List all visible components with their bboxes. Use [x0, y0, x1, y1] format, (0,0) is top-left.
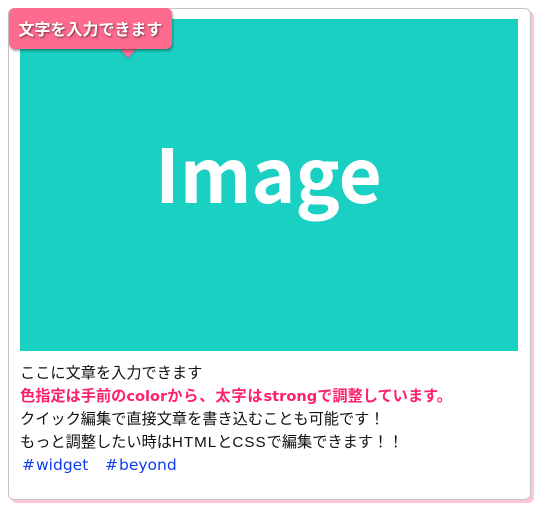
label pointer	[120, 49, 136, 58]
image placeholder: Image	[155, 118, 382, 225]
image placeholder	[20, 19, 518, 351]
text: #	[105, 456, 118, 474]
text block: クイック編集で直接文章を書き込むことも可能です！	[20, 411, 384, 428]
text block: 色指定は手前のcolorから、太字はstrongで調整しています。	[20, 388, 452, 405]
text: beyond	[119, 456, 177, 474]
text block: ここに文章を入力できます	[20, 365, 202, 382]
label badge	[9, 8, 172, 49]
text: #	[22, 456, 35, 474]
text: widget	[36, 456, 88, 474]
text block: もっと調整したい時はHTMLとCSSで編集できます！！	[20, 434, 403, 451]
hashtags	[22, 456, 177, 474]
text block	[20, 364, 452, 451]
label badge: 文字を入力できます	[18, 16, 162, 40]
